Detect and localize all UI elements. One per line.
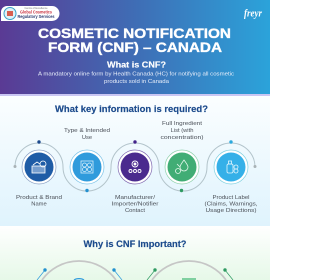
label: Product & Brand — [16, 195, 62, 201]
text: CNF definition — [38, 72, 234, 85]
panel: header banner — [0, 0, 270, 96]
item: Manufacturer/Importer/Notifier Contact — [112, 140, 159, 214]
icon: product box and gear — [32, 161, 46, 173]
title — [38, 26, 231, 55]
item: Product Label — [204, 140, 258, 214]
icon: network grid — [81, 161, 93, 173]
icon: bottle — [227, 161, 238, 173]
heading: Why is CNF Important?: Why is CNF Important? — [84, 239, 186, 249]
logo: Global Cosmetics Regulatory Services — [1, 6, 60, 21]
label: Usage Directions) — [206, 208, 257, 214]
item: Type & Intended Use — [64, 128, 110, 192]
label: Product Label — [212, 195, 250, 201]
panel: key information — [0, 96, 270, 226]
logo: Global Cosmetics Regulatory Services: Regulatory Services — [18, 14, 55, 19]
heading: What is CNF?: What is CNF? — [107, 60, 166, 70]
label: Use — [82, 135, 92, 141]
label: Manufacturer/ — [115, 195, 155, 201]
title: FORM (CNF) – CANADA — [48, 40, 222, 55]
label — [160, 121, 204, 141]
reason 1: arc with blue connectors — [37, 261, 122, 280]
logo: Global Cosmetics Regulatory Services: Global Cosmetics — [20, 10, 53, 14]
label: Type & Intended — [64, 128, 110, 134]
text: CNF definition: A mandatory online form by Health Canada (HC) for notifying all cosmetic — [38, 72, 234, 78]
panel: why CNF is important — [0, 226, 270, 280]
label: concentration) — [160, 135, 204, 141]
wave connector — [15, 143, 255, 191]
label — [112, 195, 159, 214]
label — [64, 128, 110, 141]
label: Contact — [125, 208, 145, 214]
label — [204, 195, 258, 214]
item: Product & Brand Name — [14, 140, 62, 208]
heading: What key information is required?: What key information is required? — [55, 104, 208, 114]
label: (Claims, Warnings, — [204, 202, 258, 208]
title: COSMETIC NOTIFICATION — [38, 26, 231, 41]
label: Importer/Notifier — [112, 202, 159, 208]
label: Full Ingredient — [162, 121, 202, 127]
item: Full Ingredient List — [160, 121, 204, 192]
label — [16, 195, 62, 208]
label: Name — [31, 202, 47, 208]
logo: Global Cosmetics Regulatory Services: Centre of Excellence — [24, 7, 48, 10]
logo: freyr: freyr — [244, 8, 263, 20]
icon: drop and leaves — [176, 160, 188, 174]
label: List (with — [171, 128, 193, 134]
text: CNF definition: products sold in Canada — [104, 79, 170, 85]
reason 2: arc with green connectors — [147, 261, 233, 280]
icon: gear and people — [129, 161, 141, 172]
